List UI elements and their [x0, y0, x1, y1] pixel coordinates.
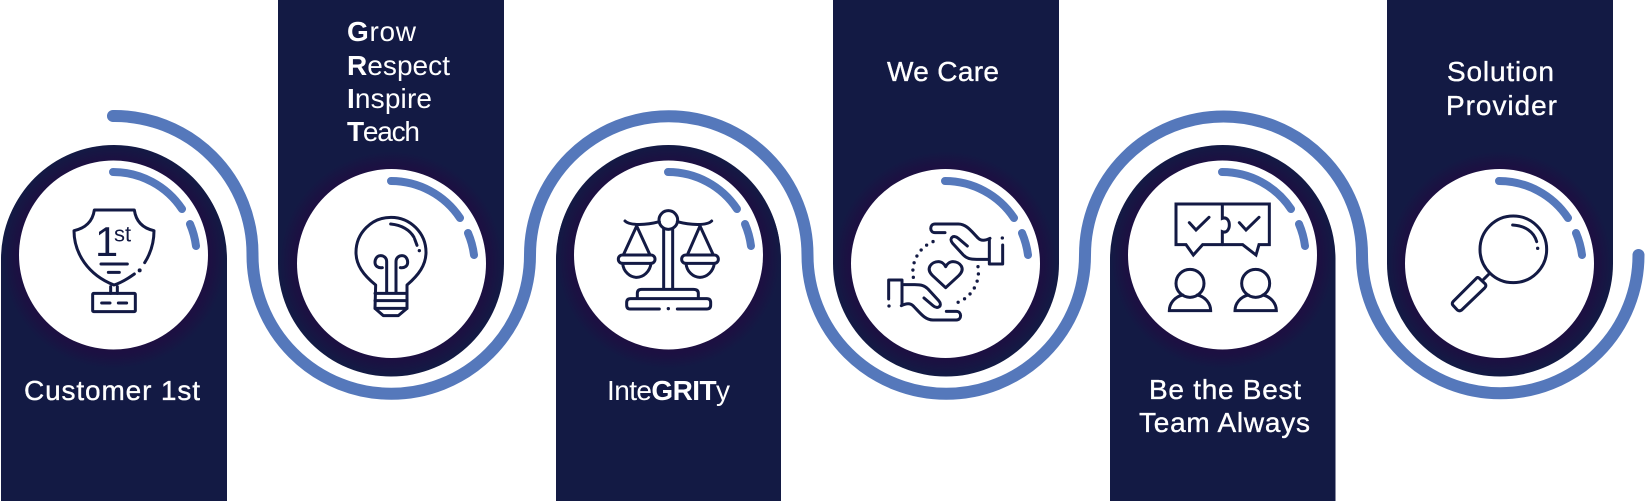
white circle	[851, 169, 1040, 358]
icon: light bulb	[356, 217, 426, 316]
highlight arc	[945, 181, 1028, 255]
panel shape	[1, 146, 227, 501]
label: InteGRITy: InteGRITy	[607, 375, 730, 406]
white circle	[1128, 160, 1317, 350]
panel: Solution Provider	[1387, 0, 1613, 376]
panel shape	[556, 146, 781, 501]
highlight arc	[391, 181, 474, 255]
panel: We Care	[833, 0, 1059, 376]
icon: scales of justice	[618, 211, 718, 310]
label: Solution Provider: Provider	[1446, 90, 1557, 121]
icon: caring hands with heart	[887, 224, 1004, 320]
label: Grow Respect Inspire Teach: Grow	[347, 16, 417, 47]
panel shape	[1110, 146, 1336, 501]
icon: first place trophy	[74, 210, 154, 312]
label: Be the Best Team Always: Team Always	[1139, 407, 1310, 438]
panel shape	[278, 0, 504, 376]
panel: InteGRITy	[556, 145, 781, 501]
label: Customer 1st: Customer 1st	[24, 375, 200, 406]
circle shading	[834, 152, 1058, 376]
circle shading	[280, 152, 504, 376]
blue wave line	[113, 116, 1638, 394]
label: Be the Best Team Always: Be the Best	[1149, 374, 1301, 405]
panel shape	[833, 0, 1059, 376]
panel: Customer 1st	[1, 145, 227, 501]
label: Be the Best Team Always	[1139, 374, 1310, 438]
label: Solution Provider	[1446, 56, 1557, 121]
label: Grow Respect Inspire Teach: Respect	[347, 50, 450, 81]
circle shading	[556, 145, 780, 369]
label: Grow Respect Inspire Teach: Teach	[347, 116, 420, 147]
white circle	[1405, 169, 1594, 358]
label: Grow Respect Inspire Teach	[347, 16, 450, 147]
white circle	[19, 160, 208, 350]
highlight arc	[113, 172, 196, 246]
circle shading	[1388, 152, 1612, 376]
icon: magnifying glass	[1452, 216, 1547, 311]
label: Solution Provider: Solution	[1447, 56, 1554, 87]
label: We Care: We Care	[887, 56, 999, 87]
white circle	[297, 169, 486, 358]
icon: first place trophy: 1	[95, 218, 118, 265]
label: Grow Respect Inspire Teach: Inspire	[347, 83, 432, 114]
circle shading	[2, 145, 226, 369]
panel: GRIT	[278, 0, 504, 376]
highlight arc	[668, 172, 751, 246]
icon: first place trophy: st	[114, 222, 131, 247]
panel: Be the Best Team Always	[1110, 145, 1336, 501]
highlight arc	[1222, 172, 1305, 246]
icon: team with puzzle speech bubbles	[1169, 204, 1276, 311]
panel shape	[1387, 0, 1613, 376]
white circle	[574, 160, 763, 350]
highlight arc	[1499, 181, 1582, 255]
circle shading	[1111, 145, 1335, 369]
